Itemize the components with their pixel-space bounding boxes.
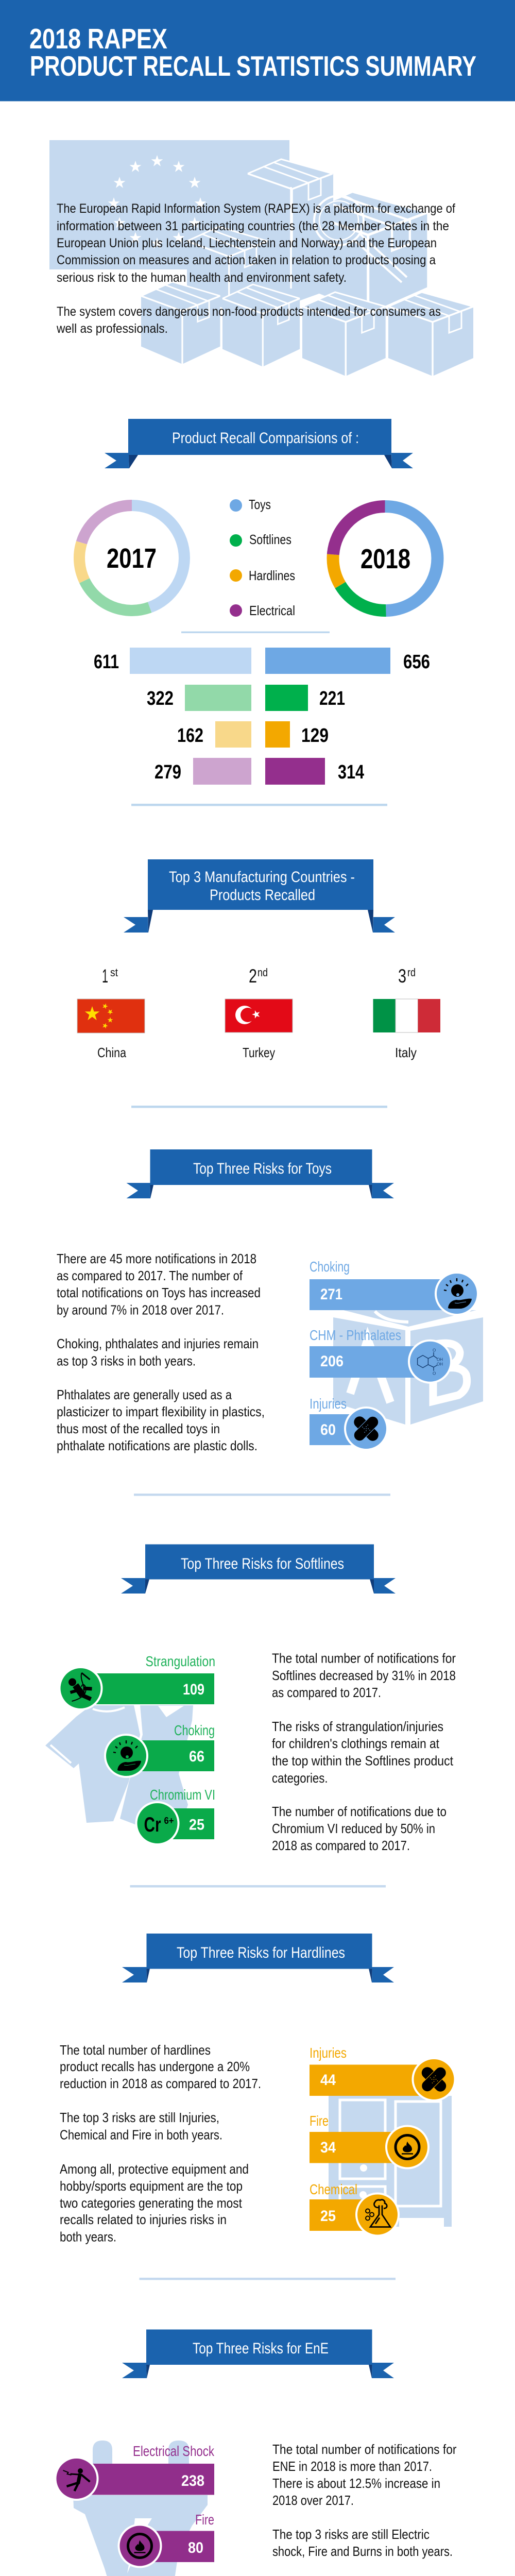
country: China: 1 — [102, 965, 108, 987]
intro text: serious risk to the human health and environment safety. — [57, 270, 347, 285]
text: hardlines: Chemical and Fire in both years. — [60, 2127, 222, 2142]
chart: toys risks — [310, 1259, 483, 1450]
icon: chromium — [136, 1802, 178, 1844]
text: softlines: the top within the Softlines product — [272, 1753, 454, 1768]
text: hardlines: two categories generating the most — [60, 2195, 243, 2211]
chart: EnE risks — [56, 2441, 215, 2576]
flag: Italy — [373, 999, 440, 1032]
intro text: The European Rapid Information System (RAPEX) is a platform for exchange of — [57, 201, 455, 216]
donut chart 2017 — [79, 505, 184, 611]
text: hardlines: reduction in 2018 as compared to 2017. — [60, 2076, 261, 2091]
banner: toys: Top Three Risks for Toys — [193, 1160, 332, 1177]
text: EnE — [272, 2442, 457, 2576]
bar chart: 2017 vs 2018: 221 — [319, 688, 345, 709]
chart: softlines risks: Chromium VI — [150, 1787, 215, 1803]
text: toys: phthalate notifications are plastic dolls. — [57, 1438, 258, 1453]
banner: EnE: Top Three Risks for EnE — [193, 2340, 329, 2357]
legend — [230, 497, 295, 618]
chart: toys risks: CHM - Phthalates — [310, 1327, 401, 1343]
text: softlines: for children's clothings remain at — [272, 1736, 440, 1751]
intro text: Commission on measures and action taken in relation to products posing a — [57, 253, 436, 267]
plug background — [73, 2441, 208, 2576]
text: toys: thus most of the recalled toys in — [57, 1421, 220, 1436]
text: EnE: The top 3 risks are still Electric — [272, 2527, 430, 2542]
text: toys: by around 7% in 2018 over 2017. — [57, 1302, 224, 1318]
text: toys: as compared to 2017. The number of — [57, 1268, 243, 1283]
cabinet background — [319, 2096, 453, 2230]
icon: phthalate molecule: O — [433, 1348, 436, 1353]
bar chart: 2017 vs 2018: 322 — [147, 688, 174, 709]
banner: softlines — [121, 1545, 396, 1594]
country: Turkey: nd — [258, 966, 268, 979]
text: EnE: shock, Fire and Burns in both years. — [272, 2544, 453, 2559]
donut chart 2018: 2018 — [360, 544, 410, 574]
text: toys: total notifications on Toys has increased — [57, 1285, 261, 1300]
text: EnE: 2018 over 2017. — [272, 2493, 354, 2508]
country: Italy: Italy — [395, 1045, 417, 1060]
title — [29, 23, 476, 82]
intro text: well as professionals. — [56, 321, 168, 336]
intro panel — [49, 140, 473, 376]
chart: EnE risks: Fire — [195, 2512, 214, 2528]
text: toys — [57, 1251, 265, 1453]
text: softlines: The number of notifications due to — [272, 1804, 447, 1819]
bar chart: 2017 vs 2018: 279 — [154, 761, 181, 783]
icon: strangulation — [60, 1667, 102, 1709]
EU flag background — [49, 140, 289, 269]
text: softlines: Softlines decreased by 31% in 2018 — [272, 1668, 456, 1683]
icon: fire — [118, 2524, 161, 2567]
banner: product recall comparisons: Product Recall Comparisions of : — [172, 430, 359, 447]
bar chart: 2017 vs 2018: 611 — [94, 651, 119, 673]
text: hardlines: hobby/sports equipment are the top — [60, 2178, 243, 2194]
icon: phthalate molecule — [409, 1341, 451, 1383]
flag: Turkey — [225, 999, 293, 1032]
chart: softlines risks: Strangulation — [145, 1653, 215, 1669]
chart: hardlines risks: Fire — [310, 2113, 329, 2129]
chart: softlines risks: Choking — [174, 1722, 215, 1738]
country: Turkey: 2 — [249, 965, 257, 987]
country: China: China — [97, 1045, 126, 1060]
text: softlines: The total number of notifications for — [272, 1651, 456, 1666]
text: softlines: categories. — [272, 1770, 328, 1786]
legend: Softlines — [249, 532, 291, 547]
intro text — [56, 201, 455, 336]
banner: top 3 manufacturing countries: Top 3 Manufacturing Countries - — [169, 869, 355, 886]
country: Italy: rd — [407, 966, 416, 979]
t-shirts background — [45, 1705, 193, 1834]
chart: EnE risks: 80 — [188, 2539, 203, 2556]
icon: chemical flask — [356, 2194, 399, 2236]
icon: fire — [386, 2126, 428, 2168]
icon: chromium: 6+ — [164, 1816, 174, 1826]
bar chart: 2017 vs 2018: 162 — [177, 725, 203, 747]
icon: phthalate molecule: OH — [437, 1358, 443, 1362]
chart: EnE risks: Electrical Shock — [133, 2443, 215, 2459]
country: China: st — [110, 966, 118, 979]
chart: EnE risks: 238 — [181, 2472, 204, 2489]
icon: electric shock — [56, 2458, 98, 2500]
text: EnE: ENE in 2018 is more than 2017. — [272, 2459, 432, 2474]
chart: softlines risks: 66 — [189, 1748, 204, 1765]
text: softlines — [272, 1651, 456, 1853]
country: Italy — [373, 965, 440, 1060]
text: EnE: The total number of notifications for — [272, 2442, 457, 2457]
chart: hardlines risks: 34 — [320, 2139, 336, 2156]
banner: hardlines — [122, 1934, 394, 1982]
chart: toys risks: 206 — [320, 1353, 344, 1370]
intro text: European Union plus Iceland, Liechtenstein and Norway) and the European — [57, 236, 437, 250]
text: softlines: The risks of strangulation/injuries — [272, 1719, 443, 1734]
banner: EnE — [122, 2330, 394, 2378]
chart: toys risks: Choking — [310, 1259, 350, 1275]
icon: choking — [105, 1735, 147, 1777]
country: Italy: 3 — [398, 965, 406, 987]
text: softlines: 2018 as compared to 2017. — [272, 1838, 410, 1853]
chart: softlines risks — [45, 1653, 215, 1844]
chart: hardlines risks: 44 — [320, 2072, 336, 2089]
chart: hardlines risks: Injuries — [310, 2045, 347, 2061]
banner: top 3 manufacturing countries: Products Recalled — [210, 887, 315, 904]
legend: Toys — [249, 497, 271, 512]
chart: toys risks: Injuries — [310, 1396, 347, 1412]
bar chart: 2017 vs 2018 — [94, 648, 430, 785]
bar chart: 2017 vs 2018: 129 — [301, 725, 329, 747]
text: hardlines: both years. — [60, 2229, 116, 2244]
banner: top 3 manufacturing countries — [124, 859, 395, 933]
text: hardlines — [60, 2042, 261, 2244]
text: softlines: as compared to 2017. — [272, 1685, 381, 1700]
text: toys: plasticizer to impart flexibility in plastics, — [57, 1404, 265, 1419]
icon: choking — [436, 1273, 478, 1315]
country: Turkey: Turkey — [243, 1045, 275, 1060]
product boxes background — [141, 159, 473, 376]
donut chart 2018 — [333, 506, 437, 611]
icon: bandage — [413, 2058, 455, 2100]
legend: Electrical — [249, 603, 295, 618]
text: hardlines: Among all, protective equipment and — [60, 2161, 249, 2177]
text: toys: Choking, phthalates and injuries remain — [57, 1336, 259, 1351]
country: Turkey — [225, 965, 293, 1060]
text: toys: Phthalates are generally used as a — [57, 1387, 232, 1402]
title: 2018 RAPEX — [29, 23, 167, 55]
intro text: The system covers dangerous non-food products intended for consumers as — [57, 304, 441, 319]
toy cube background — [333, 1310, 483, 1425]
banner: toys — [127, 1149, 394, 1198]
country: China — [77, 965, 145, 1060]
chart: toys risks: 60 — [320, 1421, 336, 1438]
header band — [0, 0, 515, 101]
icon: bandage — [345, 1408, 387, 1450]
text: hardlines: product recalls has undergone a 20% — [60, 2059, 250, 2074]
chart: hardlines risks: 25 — [320, 2208, 336, 2225]
intro text: information between 31 participating countries (the 28 Member States in the — [57, 219, 449, 233]
banner: softlines: Top Three Risks for Softlines — [181, 1555, 344, 1572]
bar chart: 2017 vs 2018: 656 — [403, 651, 430, 673]
text: toys: as top 3 risks in both years. — [57, 1353, 196, 1368]
icon: phthalate molecule: O — [433, 1371, 436, 1376]
chart: softlines risks: 109 — [183, 1681, 204, 1698]
text: hardlines: recalls related to injuries risks in — [60, 2212, 227, 2227]
text: hardlines: The top 3 risks are still Injuries, — [60, 2110, 219, 2125]
chart: toys risks: 271 — [320, 1286, 342, 1303]
icon: phthalate molecule: OH — [437, 1362, 443, 1367]
banner: hardlines: Top Three Risks for Hardlines — [177, 1944, 345, 1961]
bar chart: 2017 vs 2018: 314 — [338, 761, 364, 783]
text: hardlines: The total number of hardlines — [60, 2042, 211, 2058]
chart: hardlines risks: Chemical — [310, 2181, 357, 2197]
legend: Hardlines — [249, 568, 295, 583]
text: EnE: There is about 12.5% increase in — [272, 2476, 440, 2491]
flag: China — [77, 999, 145, 1033]
chart: softlines risks: 25 — [189, 1817, 204, 1833]
icon: chromium: Cr — [144, 1814, 161, 1836]
banner: product recall comparisons — [105, 419, 413, 468]
text: toys: There are 45 more notifications in 2018 — [57, 1251, 256, 1266]
chart: hardlines risks — [310, 2045, 455, 2236]
donut chart 2017: 2017 — [107, 543, 157, 574]
text: softlines: Chromium VI reduced by 50% in — [272, 1821, 435, 1836]
